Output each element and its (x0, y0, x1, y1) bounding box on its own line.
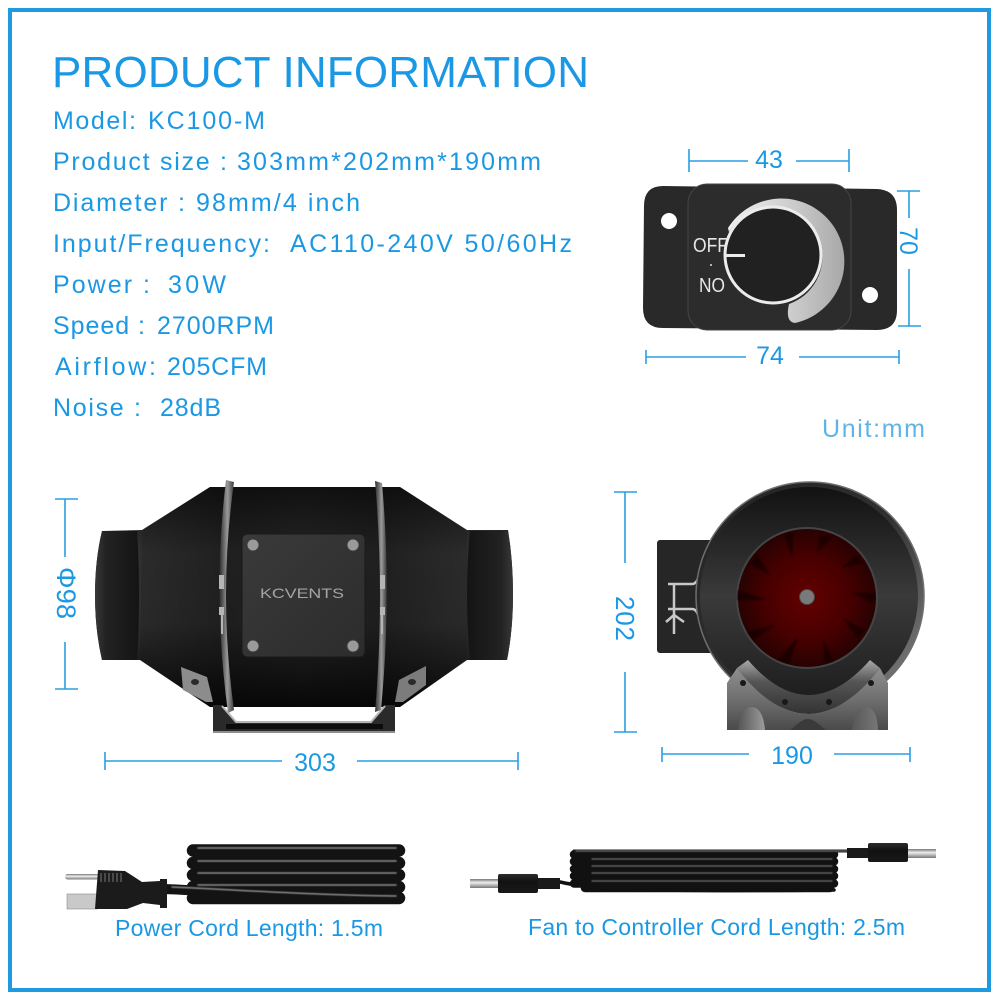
speed controller (643, 184, 897, 330)
dimension 70: 70 (894, 227, 922, 255)
spec: power: 30W (168, 271, 226, 299)
spec: product size: Product size : (53, 148, 227, 176)
controller mounting plate (643, 186, 897, 330)
cover panel (242, 534, 365, 657)
dimension 43: 43 (755, 146, 783, 174)
fan side view (95, 480, 513, 733)
dimension 74 (646, 342, 899, 370)
spec: speed: 2700RPM (157, 312, 274, 340)
off label: OFF (693, 235, 728, 257)
dimension 202 (610, 492, 640, 732)
brand logo: KCVENTS (260, 585, 344, 601)
impeller hub (800, 590, 814, 604)
spec: diameter: Diameter : (53, 189, 185, 217)
clamp hardware (666, 575, 699, 634)
title: PRODUCT INFORMATION (52, 48, 589, 97)
dimension 70 (894, 191, 922, 326)
dimension phi 98 (51, 499, 81, 689)
impeller opening (737, 528, 877, 668)
spec: power: Power : (53, 271, 150, 299)
dimension 190: 190 (771, 742, 813, 770)
spec: power (53, 271, 226, 299)
right clamp band (375, 481, 387, 712)
plug prongs (65, 874, 99, 909)
dial pointer (726, 254, 745, 257)
spec: input frequency: AC110-240V 50/60Hz (290, 230, 572, 258)
dimension 202: 202 (610, 596, 640, 641)
cord coil (560, 851, 850, 891)
spec: model: KC100-M (148, 107, 265, 135)
bracket (213, 705, 395, 733)
plug body (95, 870, 167, 909)
fan housing ring (696, 482, 924, 710)
dimension 303 (105, 749, 518, 777)
band fasteners (219, 575, 385, 634)
spec: airflow: 205CFM (167, 353, 267, 381)
spec: speed (53, 312, 274, 340)
separator dot (710, 264, 712, 266)
housing shading (140, 487, 467, 707)
spec: noise: Noise : (53, 394, 141, 422)
spec: input frequency (53, 230, 572, 258)
fan mounting tabs (181, 666, 426, 702)
fan front view (657, 482, 924, 730)
controller box behind fan (657, 540, 717, 653)
spec: model: Model: (53, 107, 136, 135)
spec: diameter: 98mm/4 inch (196, 189, 360, 217)
pipe collars (95, 531, 513, 660)
spec: diameter (53, 189, 360, 217)
plug grip ribs (101, 873, 121, 882)
dimension phi 98: Φ98 (51, 567, 81, 619)
spec: input frequency: Input/Frequency: (53, 230, 270, 258)
specification list (53, 107, 572, 422)
unit label: Unit:mm (822, 415, 925, 443)
dimension 303: 303 (294, 749, 336, 777)
power cord caption: Power Cord Length: 1.5m (115, 915, 383, 941)
panel screws (247, 539, 359, 652)
spec: model (53, 107, 265, 135)
spec: speed: Speed : (53, 312, 145, 340)
mounting holes (661, 213, 878, 303)
spec: airflow: Airflow: (55, 353, 156, 381)
left clamp band (219, 480, 234, 713)
controller front square (688, 184, 851, 330)
dimension 43 (689, 146, 849, 174)
power cord (65, 848, 399, 909)
speed scale arc (728, 198, 844, 323)
fan housing (95, 487, 513, 707)
right audio jack (847, 843, 936, 862)
controller cord (470, 843, 936, 893)
spec: product size (53, 148, 541, 176)
inner shroud (700, 487, 918, 705)
dimension 74: 74 (756, 342, 784, 370)
controller cord caption: Fan to Controller Cord Length: 2.5m (528, 914, 905, 940)
left audio jack (470, 874, 560, 893)
spec: product size: 303mm*202mm*190mm (237, 148, 541, 176)
spec: noise: 28dB (160, 394, 221, 422)
cord coil (165, 848, 399, 898)
dial knob (725, 207, 821, 303)
spec: airflow (55, 353, 267, 381)
foot bracket (727, 660, 888, 730)
dimension 190 (662, 742, 910, 770)
impeller blades (737, 533, 875, 664)
no label: NO (699, 275, 725, 297)
spec: noise (53, 394, 221, 422)
